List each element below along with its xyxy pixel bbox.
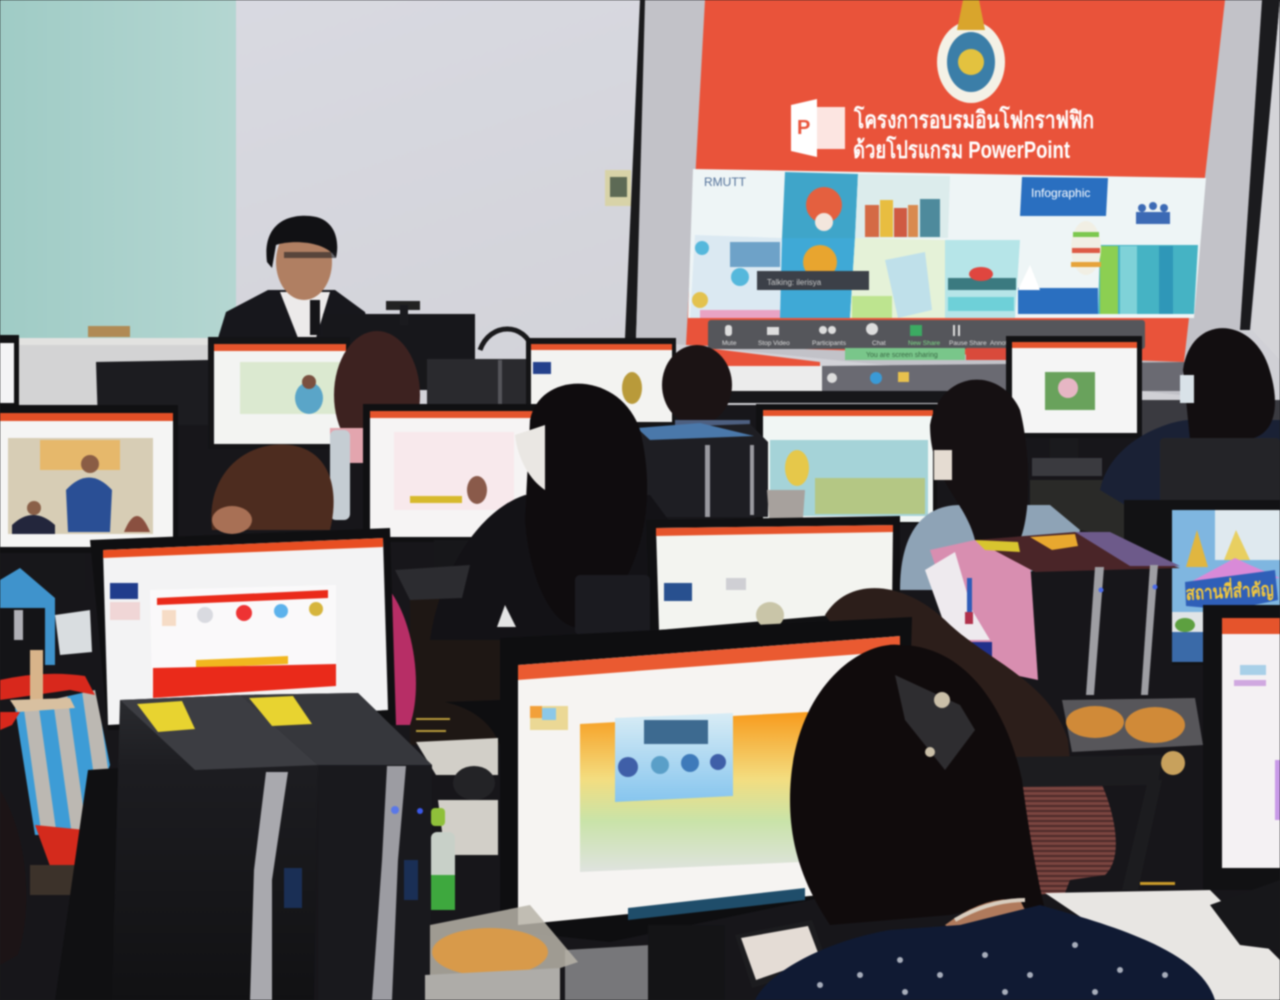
monitor: far-left edge (0, 335, 19, 407)
chair, far right (1160, 438, 1280, 504)
monitor: far right front (1203, 605, 1280, 890)
drink bottle (431, 808, 455, 910)
slide title: โครงการอบรมอินโฟกราฟฟิก (853, 105, 1094, 134)
zoom toolbar (708, 320, 1145, 349)
cup on desk (767, 490, 805, 518)
monitor: back row centre (526, 338, 676, 428)
front student, dark hair with clip (755, 645, 1215, 1000)
smartphone (735, 920, 828, 988)
snack trays, right (1062, 698, 1203, 775)
powerpoint icon (791, 99, 845, 157)
back wall (0, 0, 1280, 420)
monitor: back row left (208, 337, 350, 449)
desk surface, centre (416, 738, 498, 855)
monitor: right rear lotus slide (1006, 336, 1142, 476)
keyboard, centre (395, 565, 470, 600)
front tower pcs (112, 693, 432, 1000)
student shirt (1022, 780, 1116, 895)
presenter laptop and back equipment (323, 301, 537, 404)
powerpoint icon: P (797, 117, 810, 139)
zoom toolbar: Participants (812, 340, 847, 347)
screen sharing notice: You are screen sharing (866, 352, 938, 359)
student in black, centre (430, 384, 676, 640)
zoom toolbar: New Share (908, 340, 941, 347)
orange slide (686, 0, 1225, 362)
student behind front monitor (825, 588, 1070, 760)
main front monitor (500, 617, 912, 1000)
student in pink, back row (330, 331, 420, 463)
food container, front (425, 905, 578, 1000)
monitor: collage slide (756, 404, 937, 524)
wall thermostat (605, 170, 631, 206)
student with bun, right rear (900, 380, 1080, 590)
back black monitor (96, 360, 208, 425)
student, front left with brown hair (211, 430, 416, 725)
tower pcs, right (975, 532, 1180, 700)
presenter (218, 216, 372, 340)
zoom toolbar: Pause Share (949, 340, 987, 347)
plastic wrap on desk (55, 610, 92, 655)
monitor: right temple slide (1124, 500, 1280, 665)
whiteboard (0, 0, 236, 345)
brown desk edge, left (30, 865, 80, 895)
chair seat and floor markers, centre (416, 700, 500, 745)
monitor: slide with red banner (90, 528, 396, 730)
lower wall and desks background (0, 345, 1280, 1000)
student head edge, far left (0, 790, 26, 965)
monitor: nearly blank slide (646, 516, 900, 630)
dark chair, left of towers (55, 768, 118, 1000)
chair, front right (1015, 755, 1162, 890)
tote bag (0, 650, 110, 866)
desktop taskbar (688, 346, 1185, 391)
thumbnail collage: Talking: ilerisya (767, 278, 822, 287)
left-side boxed pc (0, 568, 55, 678)
zoom toolbar: Annotate (990, 340, 1016, 347)
university crest (937, 0, 1005, 103)
slide title: ด้วยโปรแกรม PowerPoint (853, 135, 1070, 164)
zoom toolbar: Stop Video (758, 340, 790, 347)
chair behind student (575, 575, 650, 635)
zoom toolbar: Chat (872, 340, 886, 347)
student, back row centre (662, 345, 750, 434)
floor markers, right (1140, 882, 1187, 898)
monitor: airline slide (0, 405, 178, 590)
projection screen (625, 0, 1280, 395)
thumbnail collage: Infographic (1031, 186, 1090, 200)
screen sharing notice (845, 348, 1016, 360)
thumbnail collage: RMUTT (704, 175, 747, 189)
desk surface, front (565, 880, 1280, 1000)
slide title (853, 105, 1094, 164)
monitor: back middle slide (363, 404, 543, 572)
zoom toolbar: Mute (722, 340, 737, 347)
desktop pc towers, middle (637, 423, 768, 517)
thumbnail collage (688, 169, 1206, 318)
pink document boxes and plastic bag (925, 540, 1038, 680)
student, far right rear (1100, 328, 1280, 505)
